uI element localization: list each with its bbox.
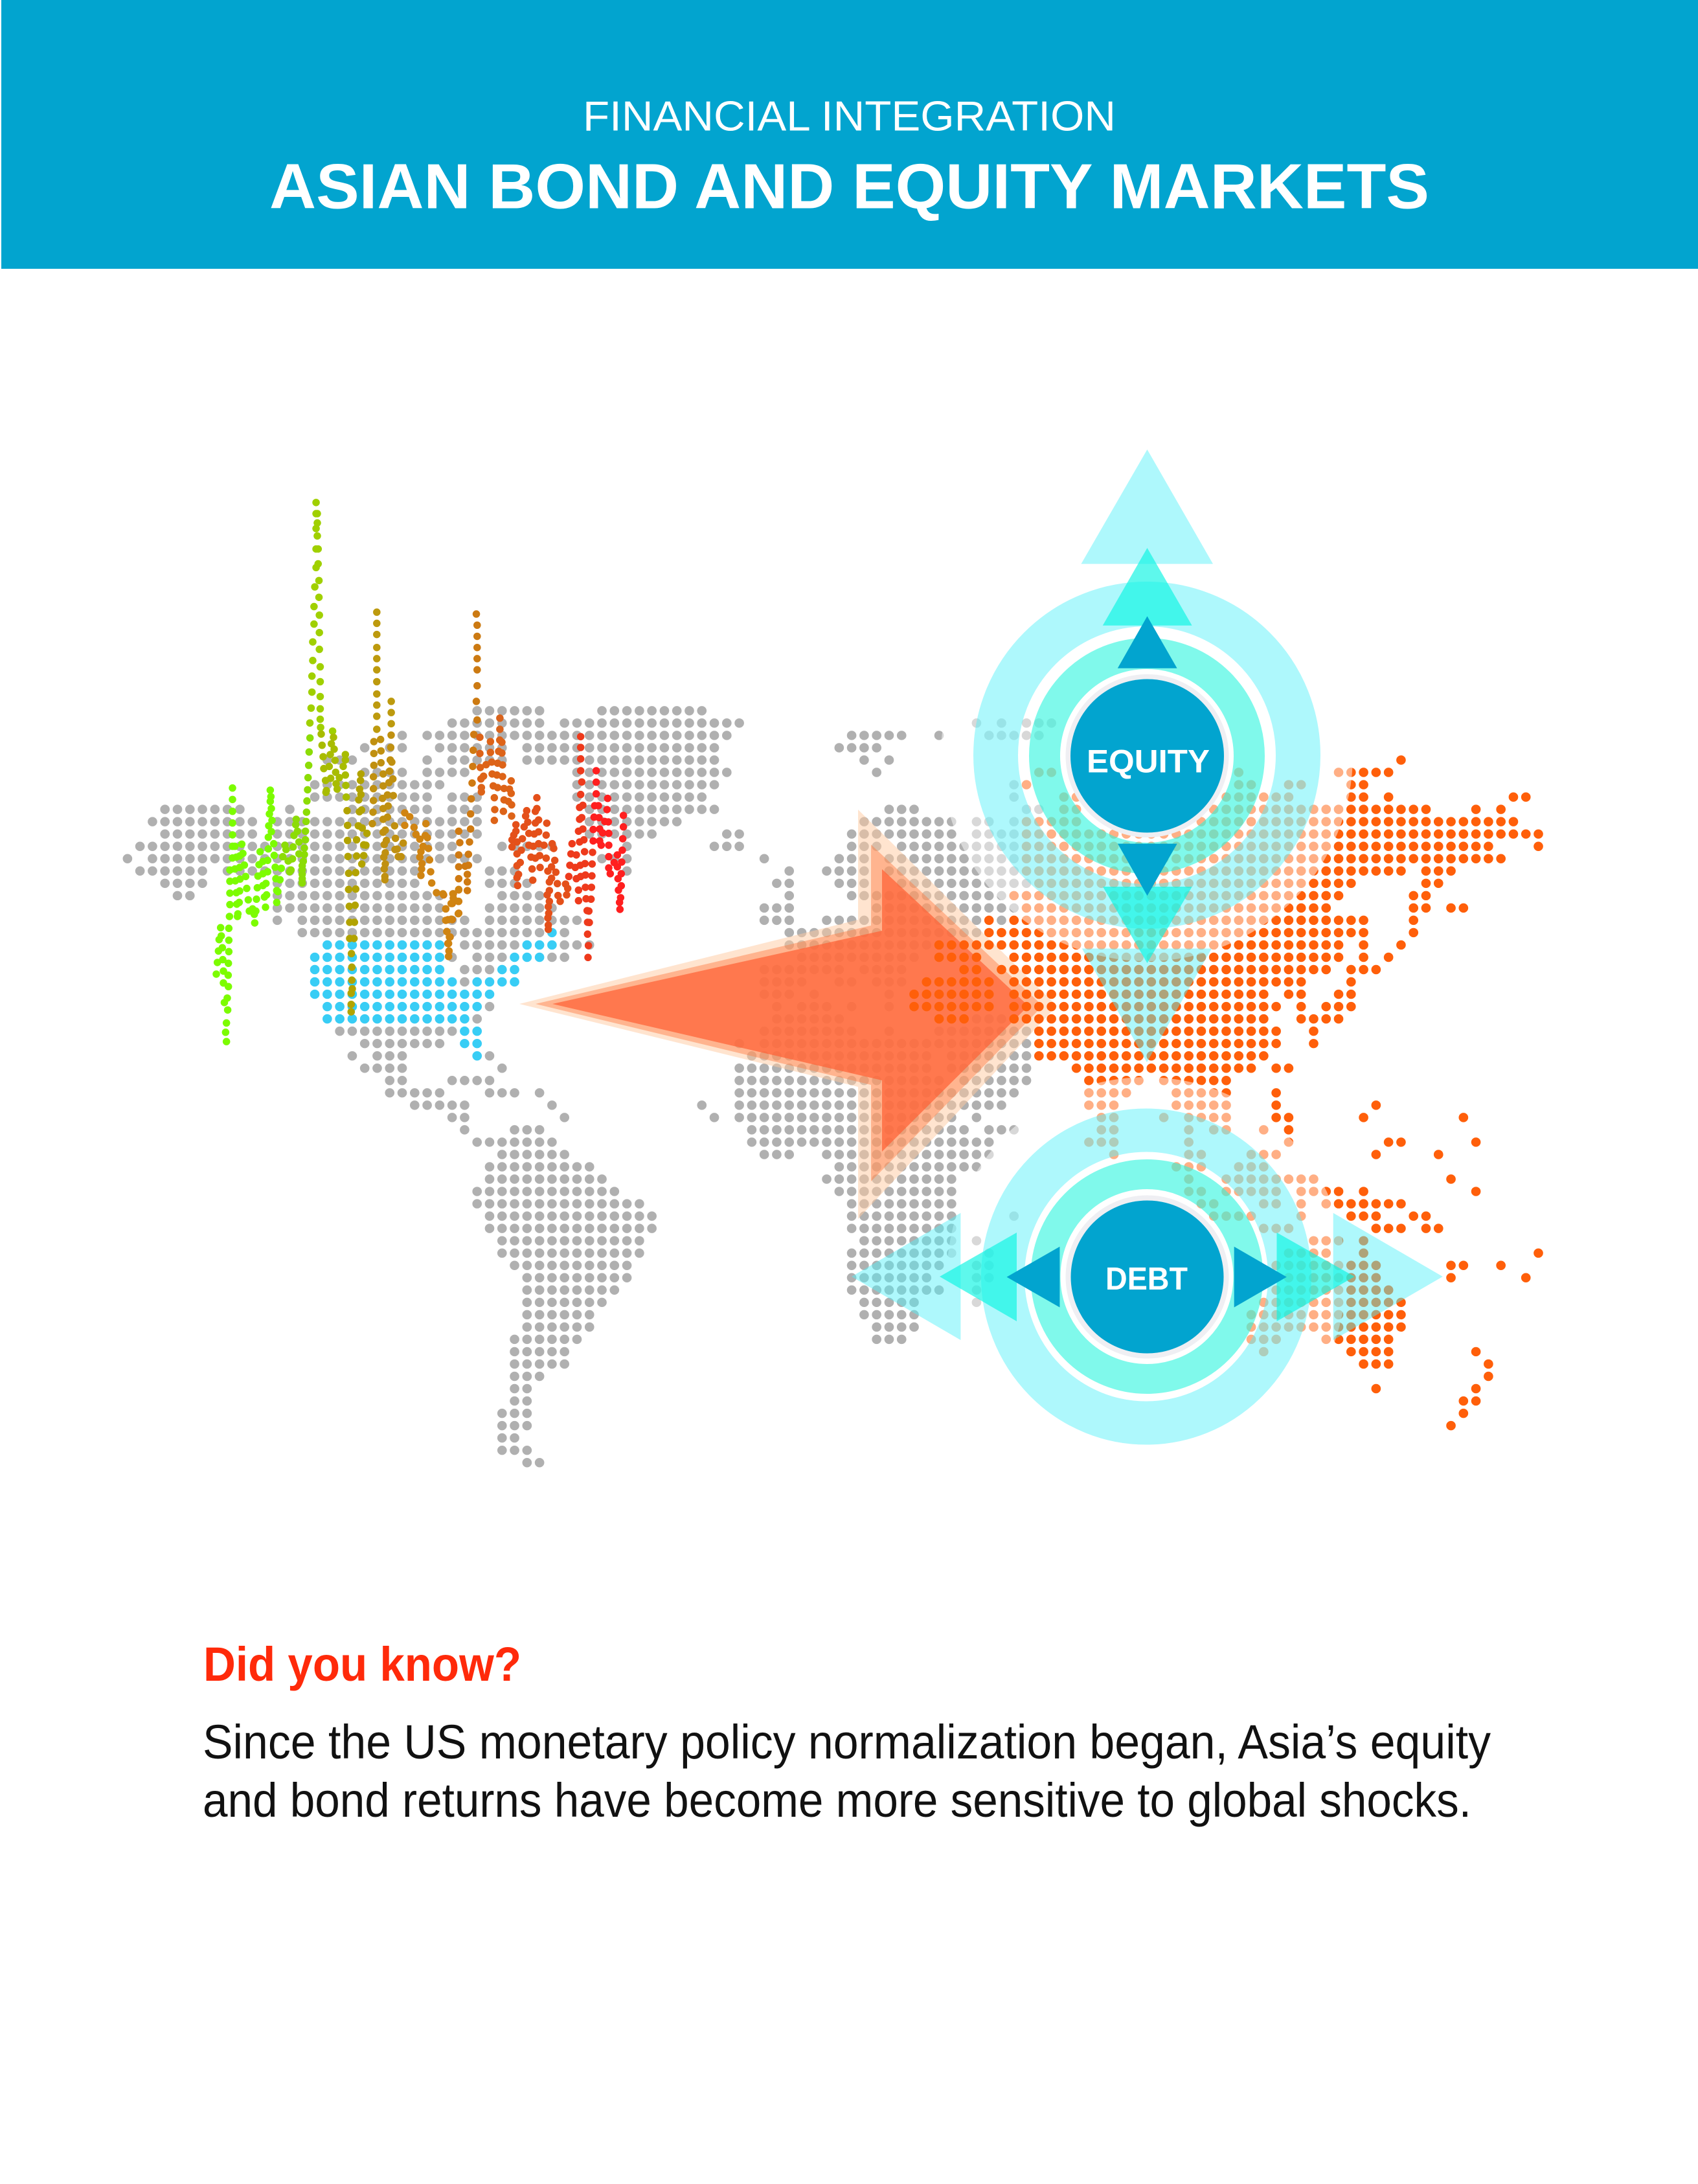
cluster dots: lime <box>216 788 281 986</box>
body text: Since the US monetary policy normalization began, Asia’s equity <box>203 1715 1491 1769</box>
debt large arrows <box>852 1213 1443 1340</box>
header kicker: FINANCIAL INTEGRATION <box>583 93 1116 140</box>
equity inner turquoise ring <box>1045 654 1249 858</box>
dotted market series: amber tail <box>436 889 458 957</box>
cluster dots: red orange <box>512 798 568 929</box>
debt disc <box>1066 1196 1229 1359</box>
debt small blue arrows <box>1006 1247 1287 1307</box>
dotted market series: upper spikes <box>224 503 500 1041</box>
debt badge <box>852 1130 1443 1423</box>
equity large arrows <box>1081 449 1213 1062</box>
did you know heading: Did you know? <box>203 1637 521 1691</box>
cluster dots: orange <box>480 737 512 821</box>
cluster dots: vermilion <box>569 736 593 957</box>
debt inner turquoise ring <box>1045 1174 1249 1379</box>
arrow: capital flow from US to Asia <box>519 810 1057 1219</box>
cluster dots: dark amber <box>444 734 474 957</box>
main title: ASIAN BOND AND EQUITY MARKETS <box>269 151 1429 222</box>
debt medium arrows <box>940 1233 1355 1321</box>
white glow behind equity <box>941 549 1353 961</box>
body text: and bond returns have become more sensitive to global shocks. <box>203 1773 1471 1827</box>
equity badge <box>996 449 1298 1062</box>
equity medium arrows <box>1103 548 1192 963</box>
cluster dots: yellow green <box>283 738 310 883</box>
equity disc <box>1066 674 1229 837</box>
United States blue dots <box>315 933 552 1056</box>
equity label: EQUITY <box>1087 744 1210 780</box>
white glow behind debt <box>947 1077 1346 1476</box>
cluster dots: gold <box>372 735 403 880</box>
spike dots: orange <box>496 718 504 729</box>
dotted world map: grey land and US <box>128 711 1052 1462</box>
spike dots: dark olive column base <box>347 994 355 1012</box>
spike dots: tall green <box>310 503 333 731</box>
grey landmass dots <box>128 711 1052 1462</box>
Asia orange dots <box>914 760 1539 1426</box>
spike dots: lower left lime tail <box>224 998 228 1041</box>
dotted market series: right clusters <box>444 734 624 957</box>
spike dots: gold <box>377 612 391 729</box>
cluster dots: amber <box>405 813 432 883</box>
debt label: DEBT <box>1105 1262 1188 1297</box>
equity outer halo ring <box>996 604 1298 907</box>
debt outer halo ring <box>1002 1130 1290 1423</box>
body text <box>203 1715 1491 1827</box>
cluster dots: red <box>593 771 624 909</box>
cluster dots: dark olive <box>347 774 367 989</box>
header banner <box>1 0 1698 269</box>
equity small blue arrows <box>1118 616 1177 896</box>
dotted market series: left clusters <box>216 734 432 989</box>
cluster dots: olive <box>321 734 346 797</box>
